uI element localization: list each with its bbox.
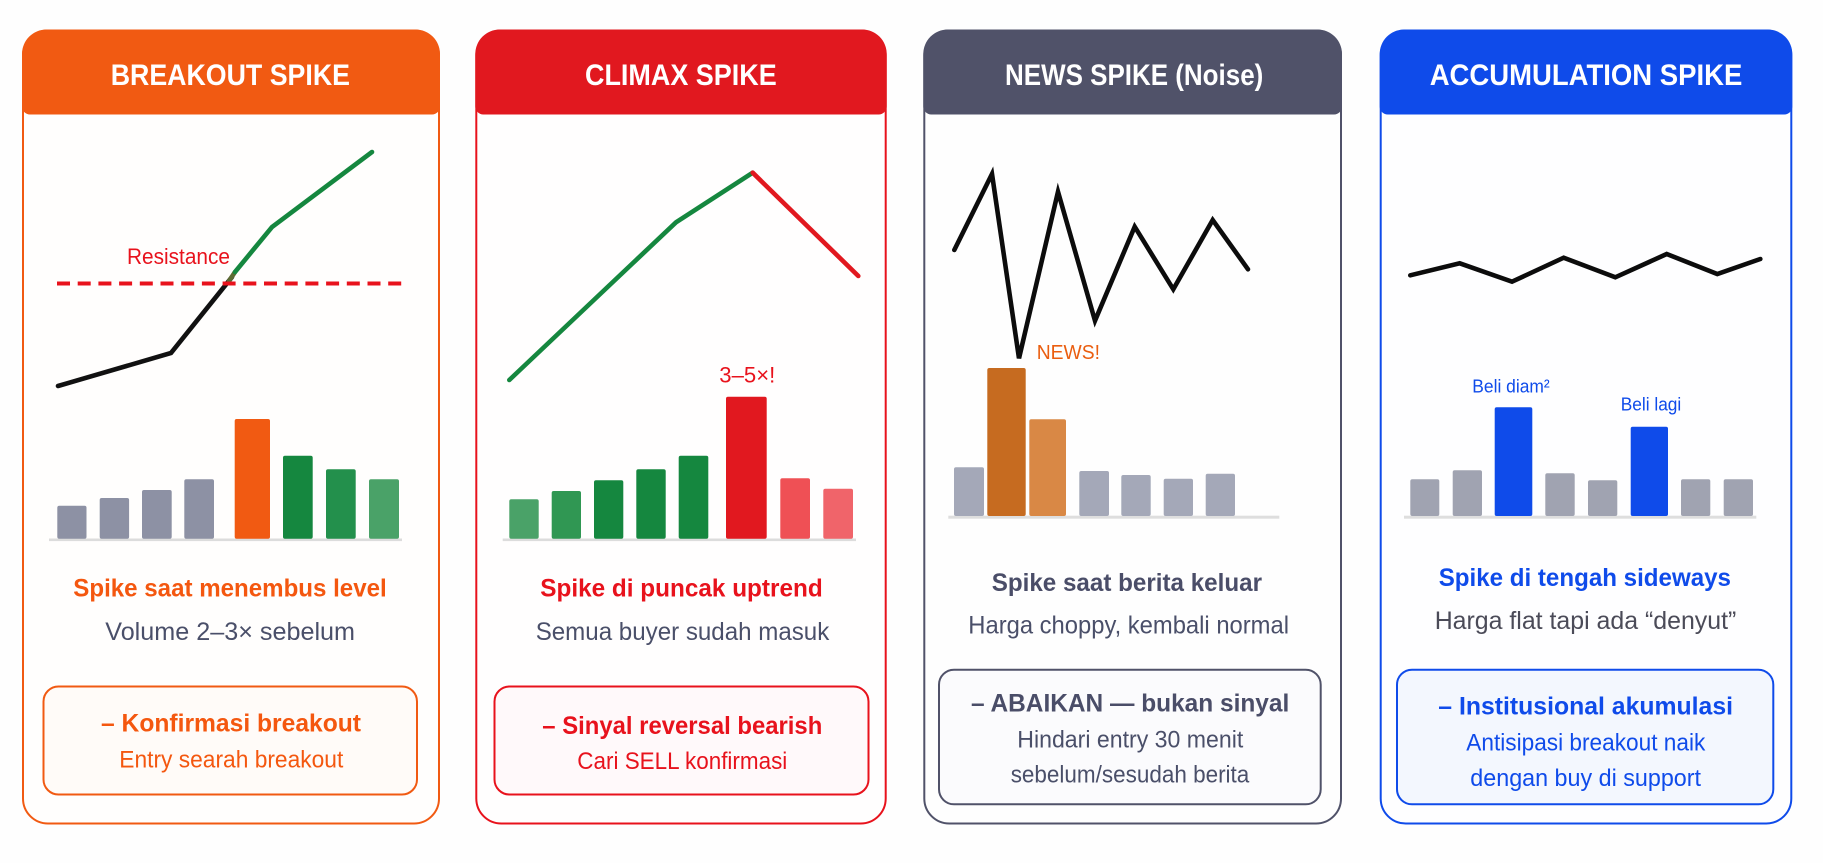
header: accumulation spike: ACCUMULATION SPIKE [1430, 59, 1742, 92]
callout: accumulation: – Institusional akumulasi [1438, 692, 1733, 720]
volume bars: news [948, 368, 1279, 519]
text: news description [968, 569, 1289, 640]
price line chart: breakout through resistance: Resistance [127, 244, 230, 269]
text: climax description [536, 575, 830, 646]
text: climax description: Semua buyer sudah masuk [536, 618, 830, 646]
text: breakout description [73, 575, 387, 646]
label: Beli diam²: Beli diam² [1472, 375, 1550, 396]
text: breakout description: Volume 2–3× sebelum [105, 618, 355, 646]
text: accumulation description: Spike di tengah sideways [1439, 564, 1731, 592]
text: accumulation description: Harga flat tapi ada “denyut” [1435, 607, 1736, 635]
header: news spike: NEWS SPIKE (Noise) [1005, 59, 1263, 92]
callout: accumulation: Antisipasi breakout naik [1466, 730, 1706, 757]
panel: climax spike [475, 30, 887, 824]
text: breakout description: Spike saat menembus level [73, 575, 387, 603]
volume bars: breakout [49, 419, 402, 541]
callout: news [939, 670, 1321, 804]
callout: climax: – Sinyal reversal bearish [542, 712, 822, 740]
volume bars: climax [503, 397, 856, 541]
header: accumulation spike [1380, 30, 1792, 114]
panel: accumulation spike [1380, 30, 1792, 824]
text: accumulation description [1435, 564, 1736, 635]
header: breakout spike [22, 30, 440, 114]
header: news spike [923, 30, 1342, 114]
panel: news spike [923, 30, 1342, 824]
callout: climax: Cari SELL konfirmasi [577, 748, 787, 775]
callout: news: Hindari entry 30 menit [1017, 726, 1244, 753]
label: Beli lagi: Beli lagi [1621, 394, 1681, 415]
header: breakout spike: BREAKOUT SPIKE [111, 59, 350, 92]
callout: accumulation: dengan buy di support [1470, 765, 1701, 792]
text: news description: Harga choppy, kembali normal [968, 612, 1289, 640]
price line chart: climax reversal [509, 173, 858, 380]
callout: climax [494, 686, 868, 794]
text: news description: Spike saat berita keluar [992, 569, 1262, 597]
callout: news: – ABAIKAN — bukan sinyal [971, 690, 1289, 718]
callout: accumulation [1397, 670, 1773, 804]
callout: breakout: – Konfirmasi breakout [101, 710, 362, 738]
callout: breakout [44, 686, 417, 794]
header: climax spike [475, 30, 887, 114]
panel: breakout spike [22, 30, 440, 824]
callout: breakout: Entry searah breakout [119, 746, 344, 773]
price line chart: choppy news [954, 174, 1248, 358]
label: 3–5×!: 3–5×! [719, 363, 775, 388]
volume bars: accumulation [1404, 407, 1756, 519]
label: NEWS!: NEWS! [1037, 342, 1100, 364]
callout: news: sebelum/sesudah berita [1011, 762, 1250, 789]
header: climax spike: CLIMAX SPIKE [585, 59, 777, 92]
price line chart: breakout through resistance [57, 152, 402, 386]
price line chart: sideways [1410, 254, 1760, 282]
text: climax description: Spike di puncak uptrend [540, 575, 823, 603]
